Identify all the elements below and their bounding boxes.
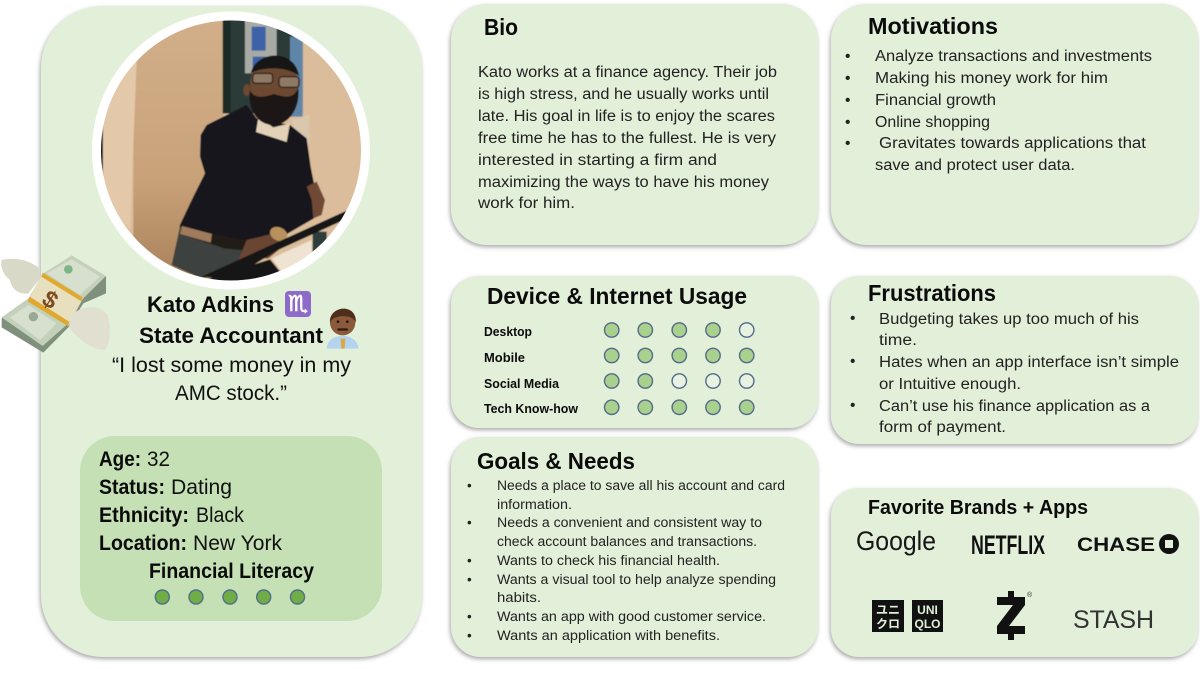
quote: AMC stock.” <box>175 382 287 405</box>
panel: profile <box>41 6 422 657</box>
panel: favorite brands and apps <box>831 488 1198 657</box>
demographics panel: Age: <box>99 448 141 471</box>
motivations list: • <box>845 92 850 109</box>
frustrations list: time. <box>879 332 917 349</box>
motivations list: • <box>845 70 850 87</box>
motivations list: save and protect user data. <box>875 157 1075 174</box>
logo: netflix: NETFLIX <box>971 530 1045 560</box>
logo: uniqlo: クロ <box>876 615 900 632</box>
demographics panel: New York <box>193 532 282 555</box>
panel: goals and needs <box>451 437 818 657</box>
frustrations list: Budgeting takes up too much of his <box>879 311 1139 328</box>
frustrations list: • <box>850 397 855 414</box>
motivations list <box>845 48 1152 174</box>
frustrations list: Hates when an app interface isn’t simple <box>879 354 1179 371</box>
usage labels: Social Media <box>484 377 560 391</box>
demographics panel: Status: <box>99 476 165 499</box>
usage labels: Tech Know-how <box>484 402 578 416</box>
motivations list: Financial growth <box>875 92 996 109</box>
usage labels: Desktop <box>484 325 532 339</box>
frustrations list <box>850 310 1179 436</box>
bio text: Kato works at a finance agency. Their job <box>478 64 777 81</box>
logo: uniqlo: UNI <box>917 603 938 617</box>
heading: frustrations: Frustrations <box>868 280 996 306</box>
goals list: Wants to check his financial health. <box>497 553 720 568</box>
quote: “I lost some money in my <box>112 354 352 377</box>
goals list: Needs a convenient and consistent way to <box>497 515 762 530</box>
demographics panel: 32 <box>147 448 170 471</box>
panel: device and internet usage <box>451 276 818 428</box>
heading: goals and needs: Goals & Needs <box>477 448 635 474</box>
goals list: habits. <box>497 590 541 605</box>
name: Kato Adkins <box>147 292 274 317</box>
heading: device and internet usage: Device & Internet Usage <box>487 283 747 309</box>
usage rating dots <box>604 323 754 414</box>
bio text <box>477 64 777 212</box>
motivations list: • <box>845 48 850 65</box>
motivations list: • <box>845 114 850 131</box>
icon: scorpio zodiac sign: ♏ <box>288 292 308 317</box>
logo: chase: CHASE <box>1077 535 1155 556</box>
frustrations list: • <box>850 310 855 327</box>
panel: bio <box>451 4 818 245</box>
quote <box>112 354 352 405</box>
panel: frustrations <box>831 276 1198 444</box>
job title: State Accountant <box>139 323 324 348</box>
bio text: late. His goal in life is to enjoy the scares <box>478 108 775 125</box>
frustrations list: • <box>850 353 855 370</box>
goals list: • <box>467 515 472 530</box>
motivations list: Making his money work for him <box>875 70 1108 87</box>
goals list: • <box>467 609 472 624</box>
goals list: Wants an application with benefits. <box>497 628 720 643</box>
goals list: information. <box>497 497 572 512</box>
logo: zelle: ® <box>1027 591 1033 599</box>
logo: uniqlo: ユニ <box>876 601 900 618</box>
icon: money with wings <box>1 256 110 353</box>
icon: man in shirt and tie <box>327 309 359 349</box>
demographics panel: Dating <box>171 476 232 499</box>
frustrations list: Can’t use his finance application as a <box>879 398 1150 415</box>
goals list: • <box>467 572 472 587</box>
heading: motivations: Motivations <box>868 13 998 39</box>
goals list: • <box>467 478 472 493</box>
profile photo <box>90 10 380 290</box>
man body <box>172 227 248 278</box>
goals list: check account balances and transactions. <box>497 534 757 549</box>
goals list: Wants an app with good customer service. <box>497 609 766 624</box>
heading: favorite brands and apps: Favorite Brands + Apps <box>868 497 1088 519</box>
goals list: Needs a place to save all his account and card <box>497 478 785 493</box>
usage labels <box>484 325 578 416</box>
usage labels: Mobile <box>484 351 525 365</box>
motivations list: Analyze transactions and investments <box>875 48 1152 65</box>
frustrations list: or Intuitive enough. <box>879 376 1021 393</box>
bio text: interested in starting a firm and <box>478 152 717 169</box>
heading: bio: Bio <box>484 14 518 40</box>
demographics panel: Financial Literacy <box>149 560 314 583</box>
goals list: • <box>467 628 472 643</box>
demographics panel: Location: <box>99 532 187 555</box>
logo: stash: STASH <box>1073 606 1154 634</box>
demographics panel <box>80 436 382 621</box>
icon: money with wings: $ <box>37 285 63 315</box>
financial literacy rating dots <box>155 590 304 604</box>
demographics panel: Ethnicity: <box>99 504 189 527</box>
bio text: maximizing the ways to have his money <box>478 174 769 191</box>
panel: motivations <box>831 4 1198 245</box>
frustrations list: form of payment. <box>879 419 1006 436</box>
bio text: free time he has to the fullest. He is very <box>478 130 776 147</box>
logo: zelle <box>997 591 1033 640</box>
bio text: is high stress, and he usually works until <box>478 86 769 103</box>
logo: google: Google <box>856 526 936 556</box>
goals list: Wants a visual tool to help analyze spending <box>497 572 776 587</box>
motivations list: Gravitates towards applications that <box>879 135 1147 152</box>
goals list <box>467 478 785 643</box>
motivations list: • <box>845 135 850 152</box>
logo: chase <box>1077 534 1179 556</box>
motivations list: Online shopping <box>875 114 990 131</box>
logo: uniqlo: QLO <box>914 617 940 631</box>
goals list: • <box>467 553 472 568</box>
demographics panel: Black <box>196 504 244 527</box>
logo: uniqlo <box>872 600 943 632</box>
bio text: work for him. <box>477 195 575 212</box>
